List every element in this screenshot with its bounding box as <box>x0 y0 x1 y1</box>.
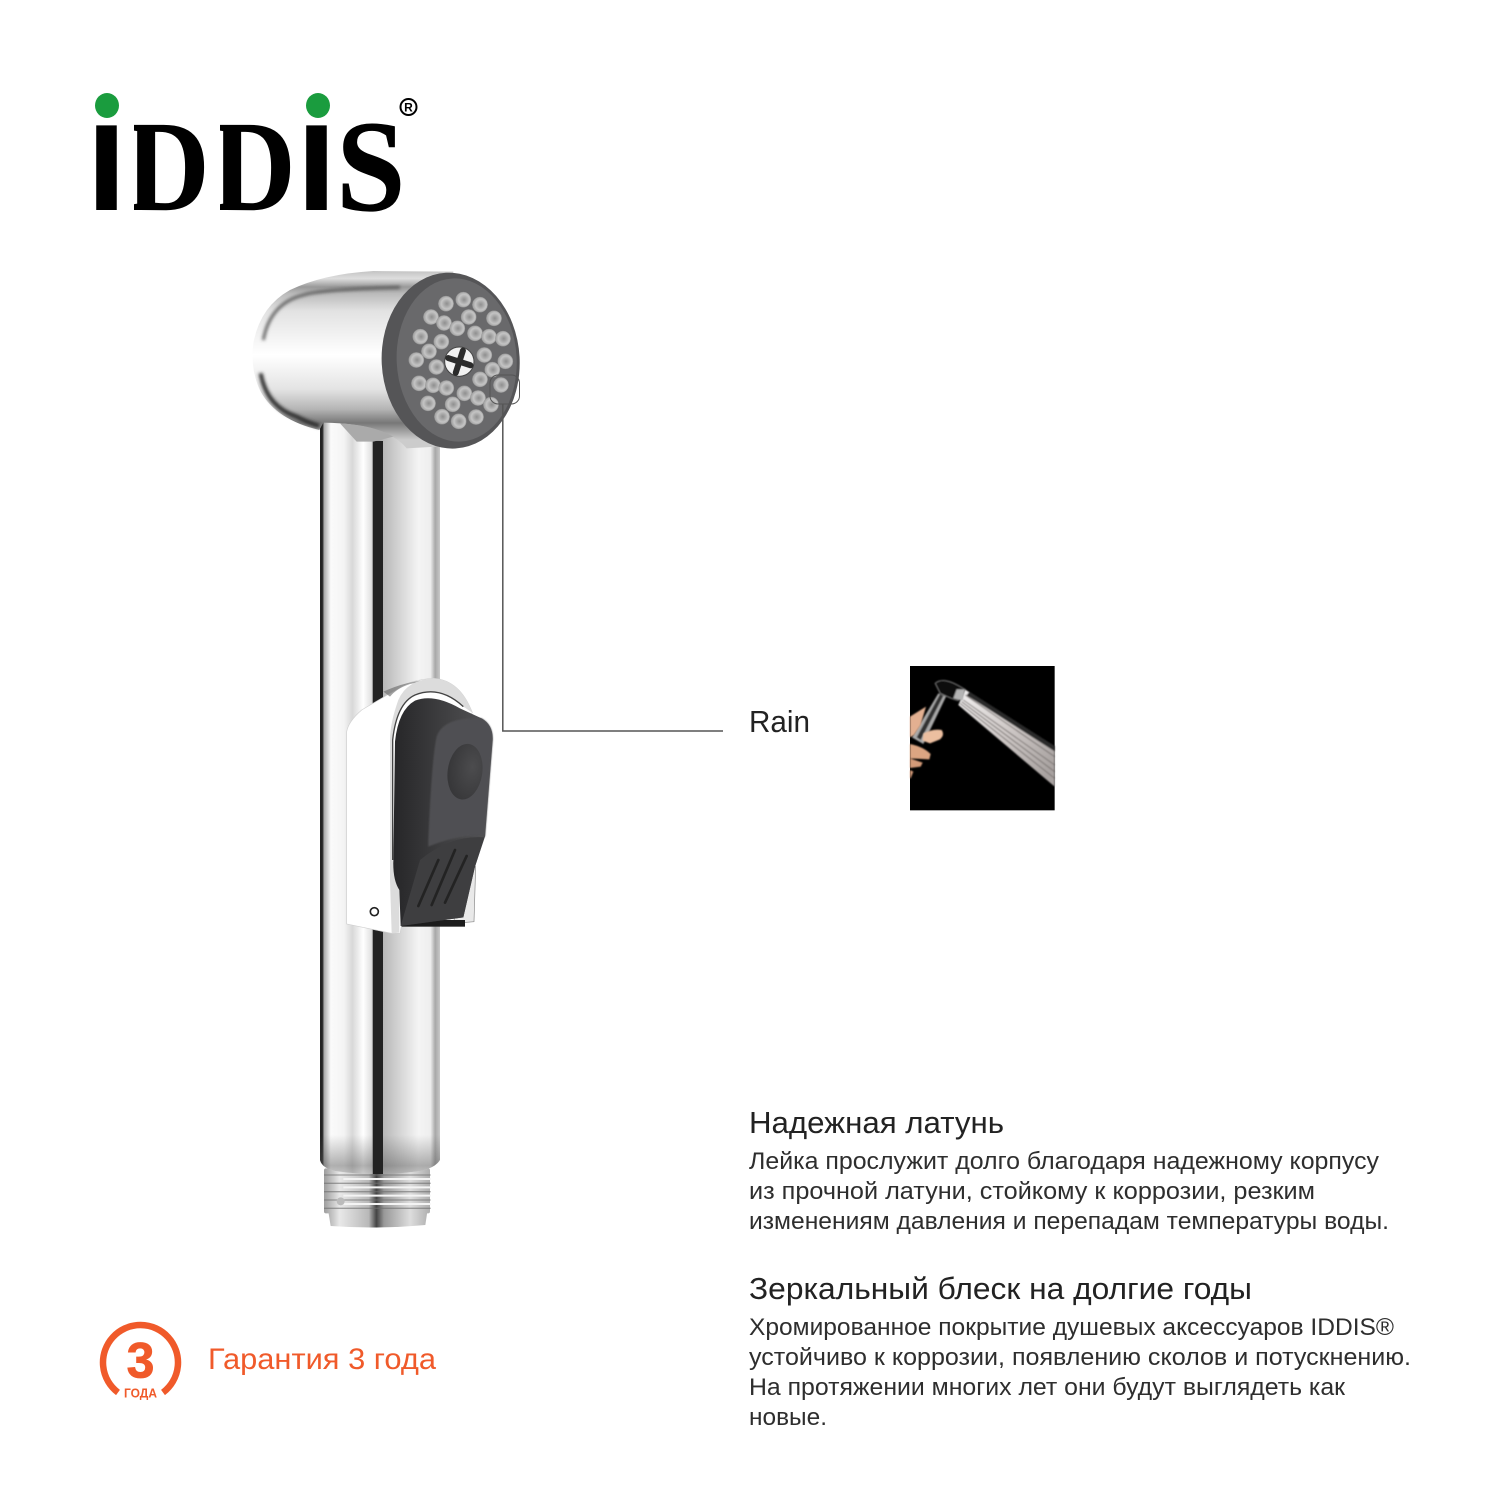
body <box>749 1148 1389 1235</box>
hand <box>910 707 943 778</box>
product: hand shower <box>253 269 524 1227</box>
logo wordmark: D <box>211 94 296 238</box>
logo wordmark: D <box>125 94 210 238</box>
shower silhouette <box>912 680 965 744</box>
lever housing <box>347 678 472 933</box>
body: устойчиво к коррозии, появлению сколов и потускнению. <box>749 1344 1411 1371</box>
registered mark <box>400 99 416 115</box>
body: новые. <box>749 1404 827 1431</box>
label: Rain: Rain <box>749 704 810 739</box>
numeral: 3 <box>127 1332 154 1388</box>
lever rear tab <box>453 860 476 923</box>
lever button <box>393 698 493 926</box>
photo: rain spray mode <box>910 666 1055 810</box>
text block: brass <box>749 1105 1389 1235</box>
body: На протяжении многих лет они будут выглядеть как <box>749 1374 1346 1401</box>
logo wordmark: I <box>297 100 336 237</box>
callout leader: Rain <box>490 375 723 731</box>
text block: chrome <box>749 1271 1411 1431</box>
body: из прочной латуни, стойкому к коррозии, резким <box>749 1178 1315 1205</box>
lever pin <box>370 908 378 916</box>
spray <box>958 689 1055 787</box>
registered mark: R <box>404 100 413 114</box>
body: изменениям давления и перепадам температуры воды. <box>749 1208 1389 1235</box>
shower tube <box>320 420 440 1174</box>
heading: Зеркальный блеск на долгие годы <box>749 1271 1252 1306</box>
body: Лейка прослужит долго благодаря надежному корпусу <box>749 1148 1379 1175</box>
years word: ГОДА <box>124 1386 157 1400</box>
logo wordmark <box>87 94 405 239</box>
logo wordmark: I <box>87 100 126 237</box>
logo green dots <box>95 93 330 118</box>
screw <box>445 347 474 376</box>
heading: Надежная латунь <box>749 1105 1004 1140</box>
nozzles <box>409 292 513 429</box>
ring <box>103 1325 178 1392</box>
sliding lever <box>347 678 493 933</box>
logo: IDDIS <box>87 93 416 239</box>
body: Хромированное покрытие душевых аксессуаров IDDIS® <box>749 1314 1394 1341</box>
logo wordmark: S <box>336 95 405 239</box>
shower head face <box>377 269 524 452</box>
warranty badge <box>103 1325 178 1400</box>
threaded connector <box>324 1168 431 1227</box>
shower head body <box>253 269 524 452</box>
body <box>749 1314 1411 1431</box>
warranty text: Гарантия 3 года <box>208 1343 436 1376</box>
